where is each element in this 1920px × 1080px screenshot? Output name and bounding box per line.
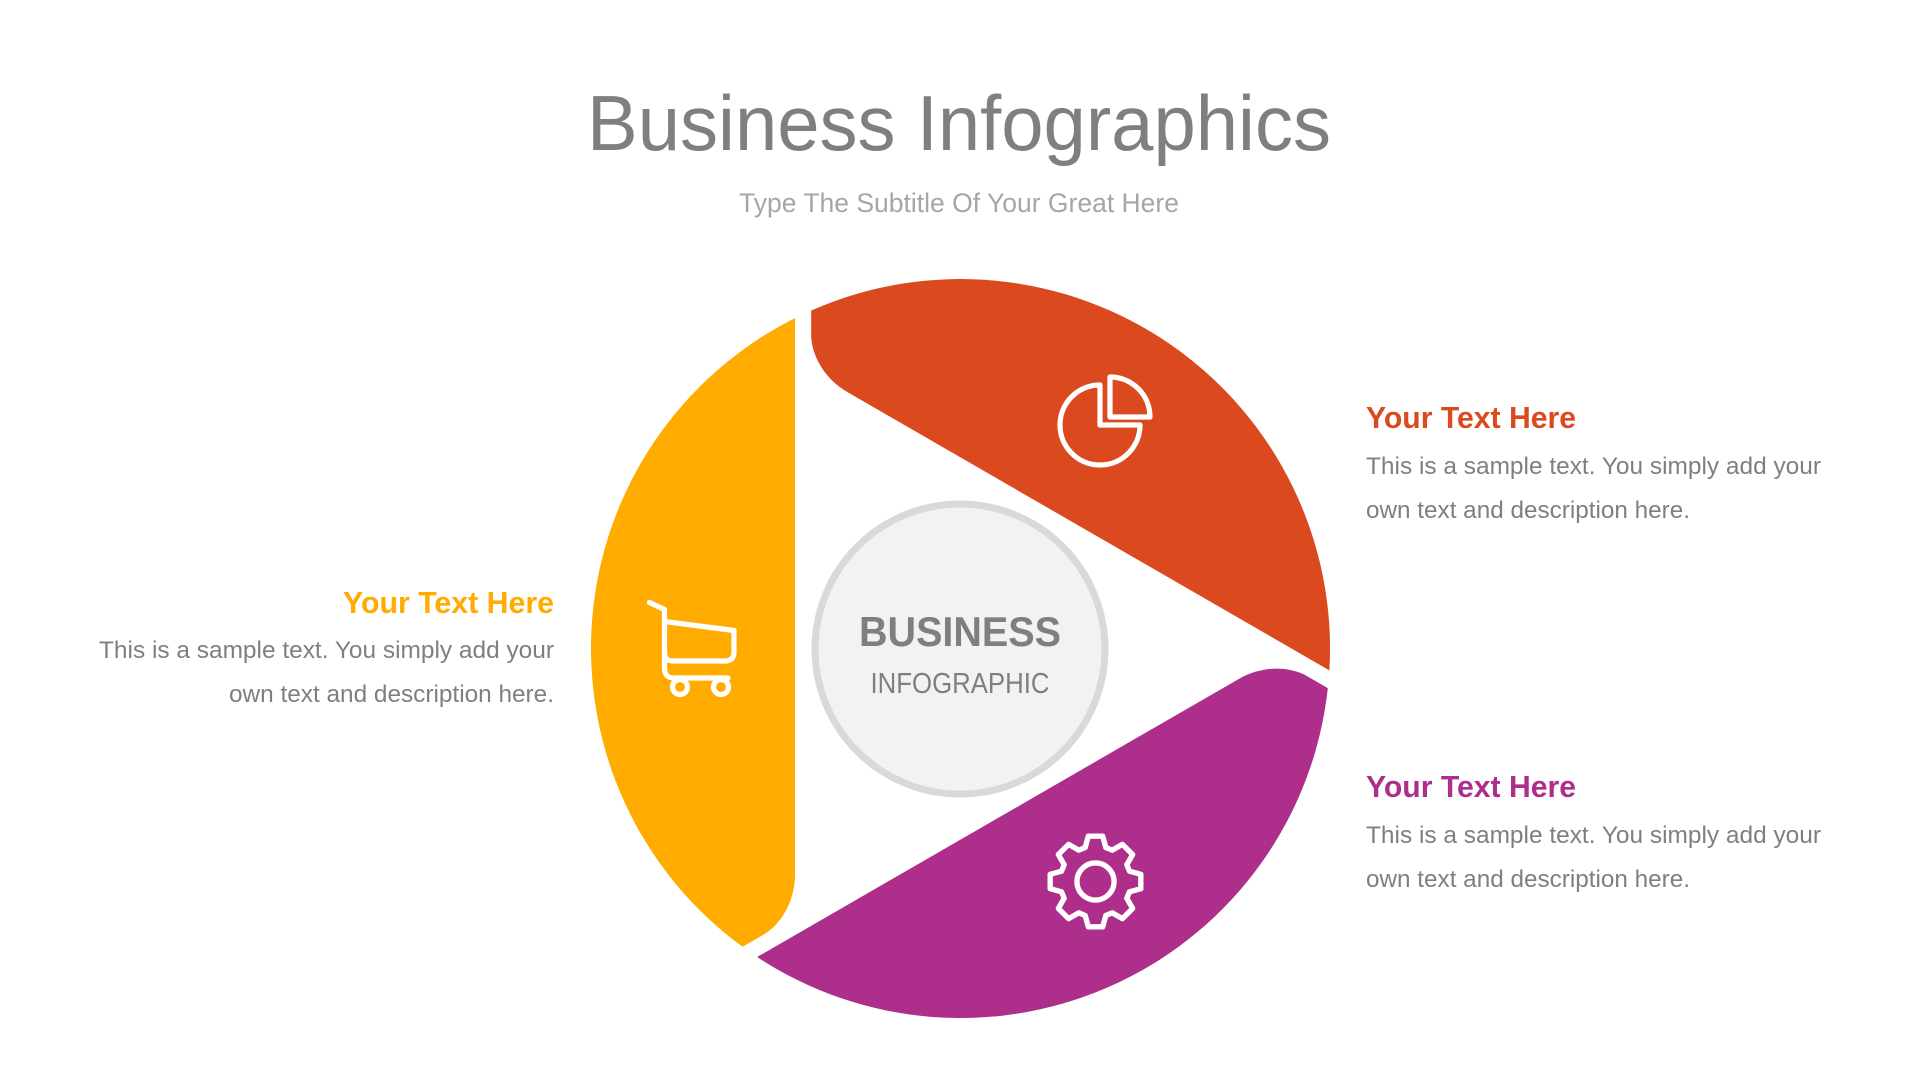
icon: shopping cart (650, 602, 734, 694)
text block: orange: Your Text Here (1366, 400, 1576, 435)
text block: yellow: own text and description here. (229, 681, 554, 708)
center badge: INFOGRAPHIC (870, 668, 1050, 700)
text block: orange: This is a sample text. You simply add your (1366, 453, 1821, 480)
title: Business Infographics (587, 79, 1331, 167)
text block: purple: Your Text Here (1366, 769, 1576, 804)
text block: orange (1366, 400, 1821, 524)
icon: gear (1050, 836, 1141, 927)
text block: yellow (99, 585, 554, 708)
text block: purple: own text and description here. (1366, 866, 1690, 893)
text block: orange: own text and description here. (1366, 497, 1690, 524)
center badge: BUSINESS (859, 608, 1061, 655)
subtitle: Type The Subtitle Of Your Great Here (739, 188, 1179, 218)
text block: yellow: Your Text Here (343, 585, 554, 620)
segment: purple (757, 669, 1328, 1018)
text block: yellow: This is a sample text. You simply add your (99, 637, 554, 664)
icon: pie chart (1060, 377, 1150, 465)
text block: purple: This is a sample text. You simply add your (1366, 822, 1821, 849)
segment: orange (811, 279, 1330, 670)
segment: yellow (591, 318, 795, 947)
text block: purple (1366, 769, 1821, 893)
center badge (815, 504, 1105, 794)
